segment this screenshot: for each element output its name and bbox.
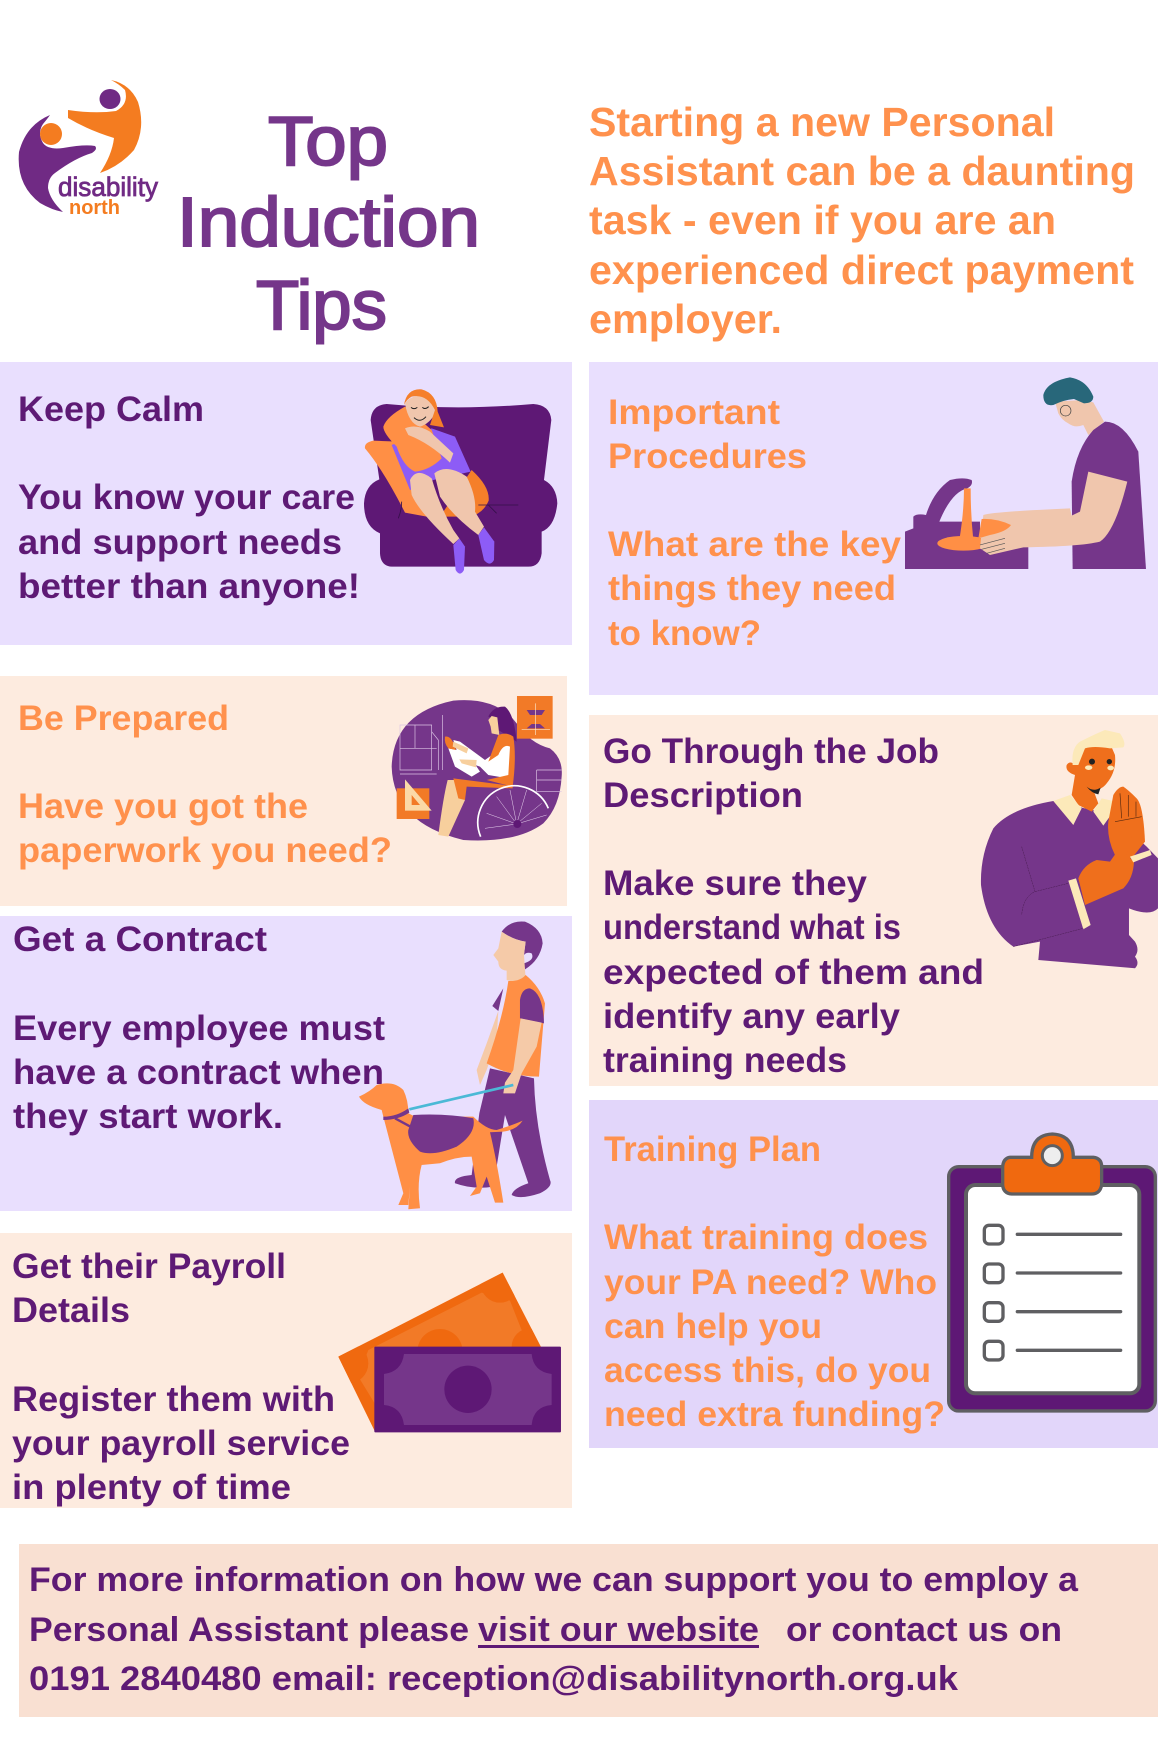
panel: training plan	[589, 1100, 1158, 1448]
panel: keep calm	[0, 362, 572, 645]
heading: important procedures	[608, 393, 807, 476]
text: keep calm body: and support needs	[18, 523, 342, 562]
title: Top	[268, 102, 388, 180]
text: be prepared body: Have you got the	[18, 787, 308, 826]
icon: woman in wheelchair with plans	[392, 696, 562, 840]
text: keep calm body: better than anyone!	[18, 567, 360, 606]
panel: get a contract	[0, 916, 572, 1211]
text: important procedures body: things they need	[608, 569, 896, 608]
text: important procedures body: to know?	[608, 614, 761, 653]
text: get a contract body	[13, 1009, 385, 1136]
text: important procedures body	[608, 525, 902, 653]
text: get a contract body: have a contract when	[13, 1053, 384, 1092]
panel: contact footer	[19, 1544, 1158, 1717]
icon: woman relaxing on sofa	[364, 389, 557, 574]
text: keep calm body	[18, 478, 360, 606]
intro text: Assistant can be a daunting	[589, 148, 1135, 194]
text: payroll body: in plenty of time	[12, 1468, 291, 1507]
heading: keep calm: Keep Calm	[18, 390, 204, 429]
panel: important procedures	[589, 362, 1158, 695]
title	[177, 102, 480, 344]
text: get a contract body: they start work.	[13, 1097, 283, 1136]
icon: banknotes	[328, 1264, 561, 1432]
heading: important procedures: Procedures	[608, 437, 807, 476]
text: training plan body: need extra funding?	[604, 1395, 945, 1434]
text: job description body: training needs	[603, 1041, 847, 1080]
intro text: task - even if you are an	[589, 197, 1056, 243]
text: training plan body: your PA need? Who	[604, 1263, 937, 1302]
heading: training plan: Training Plan	[604, 1130, 821, 1169]
text: payroll body	[12, 1380, 350, 1507]
text: be prepared body	[18, 787, 392, 870]
icon: clipboard checklist	[949, 1134, 1155, 1411]
text: job description body	[603, 864, 984, 1080]
text: contact line 2: or contact us on	[786, 1611, 1062, 1649]
text: job description body: identify any early	[603, 997, 901, 1036]
text: contact line 1: For more information on how we can support you to employ a	[29, 1561, 1079, 1599]
icon: man washing hands at sink	[905, 377, 1146, 569]
text: contact line 2: visit our website	[478, 1611, 759, 1649]
text: important procedures body: What are the key	[608, 525, 902, 564]
heading: be prepared: Be Prepared	[18, 699, 229, 738]
text: contact line 3: 0191 2840480 email: reception@disabilitynorth.org.uk	[29, 1660, 958, 1698]
icon: man gesturing	[981, 730, 1158, 968]
text: job description body: Make sure they	[603, 864, 868, 903]
heading: go through the job description: Description	[603, 776, 803, 815]
text: training plan body: access this, do you	[604, 1351, 931, 1390]
text: contact line 2	[29, 1611, 1062, 1649]
intro text: employer.	[589, 296, 782, 342]
panel: be prepared	[0, 676, 567, 906]
intro text	[589, 99, 1135, 342]
text: job description body: understand what is	[603, 908, 901, 947]
text: contact line 2: Personal Assistant please	[29, 1611, 469, 1649]
text: payroll body: Register them with	[12, 1380, 335, 1419]
text: training plan body: What training does	[604, 1218, 928, 1257]
heading: go through the job description	[603, 732, 939, 815]
title: Tips	[256, 266, 387, 344]
heading: get their payroll details: Get their Payroll	[12, 1247, 286, 1286]
intro text: experienced direct payment	[589, 247, 1134, 293]
heading: get a contract: Get a Contract	[13, 920, 267, 959]
intro text: Starting a new Personal	[589, 99, 1055, 145]
text: keep calm body: You know your care	[18, 478, 355, 517]
text: be prepared body: paperwork you need?	[18, 831, 392, 870]
title: Induction	[177, 183, 480, 261]
logo: disability north: disability	[58, 172, 158, 202]
text: get a contract body: Every employee must	[13, 1009, 385, 1048]
text: training plan body: can help you	[604, 1307, 822, 1346]
panel: job description	[589, 715, 1158, 1086]
text: job description body: expected of them and	[603, 953, 984, 992]
heading: get their payroll details: Details	[12, 1291, 130, 1330]
text: payroll body: your payroll service	[12, 1424, 350, 1463]
logo: disability north	[19, 80, 158, 219]
heading: get their payroll details	[12, 1247, 286, 1330]
heading: go through the job description: Go Through the Job	[603, 732, 939, 771]
text: training plan body	[604, 1218, 945, 1434]
logo: disability north: north	[69, 197, 120, 219]
icon: person walking guide dog	[359, 921, 551, 1209]
panel: payroll details	[0, 1233, 572, 1508]
heading: important procedures: Important	[608, 393, 780, 432]
